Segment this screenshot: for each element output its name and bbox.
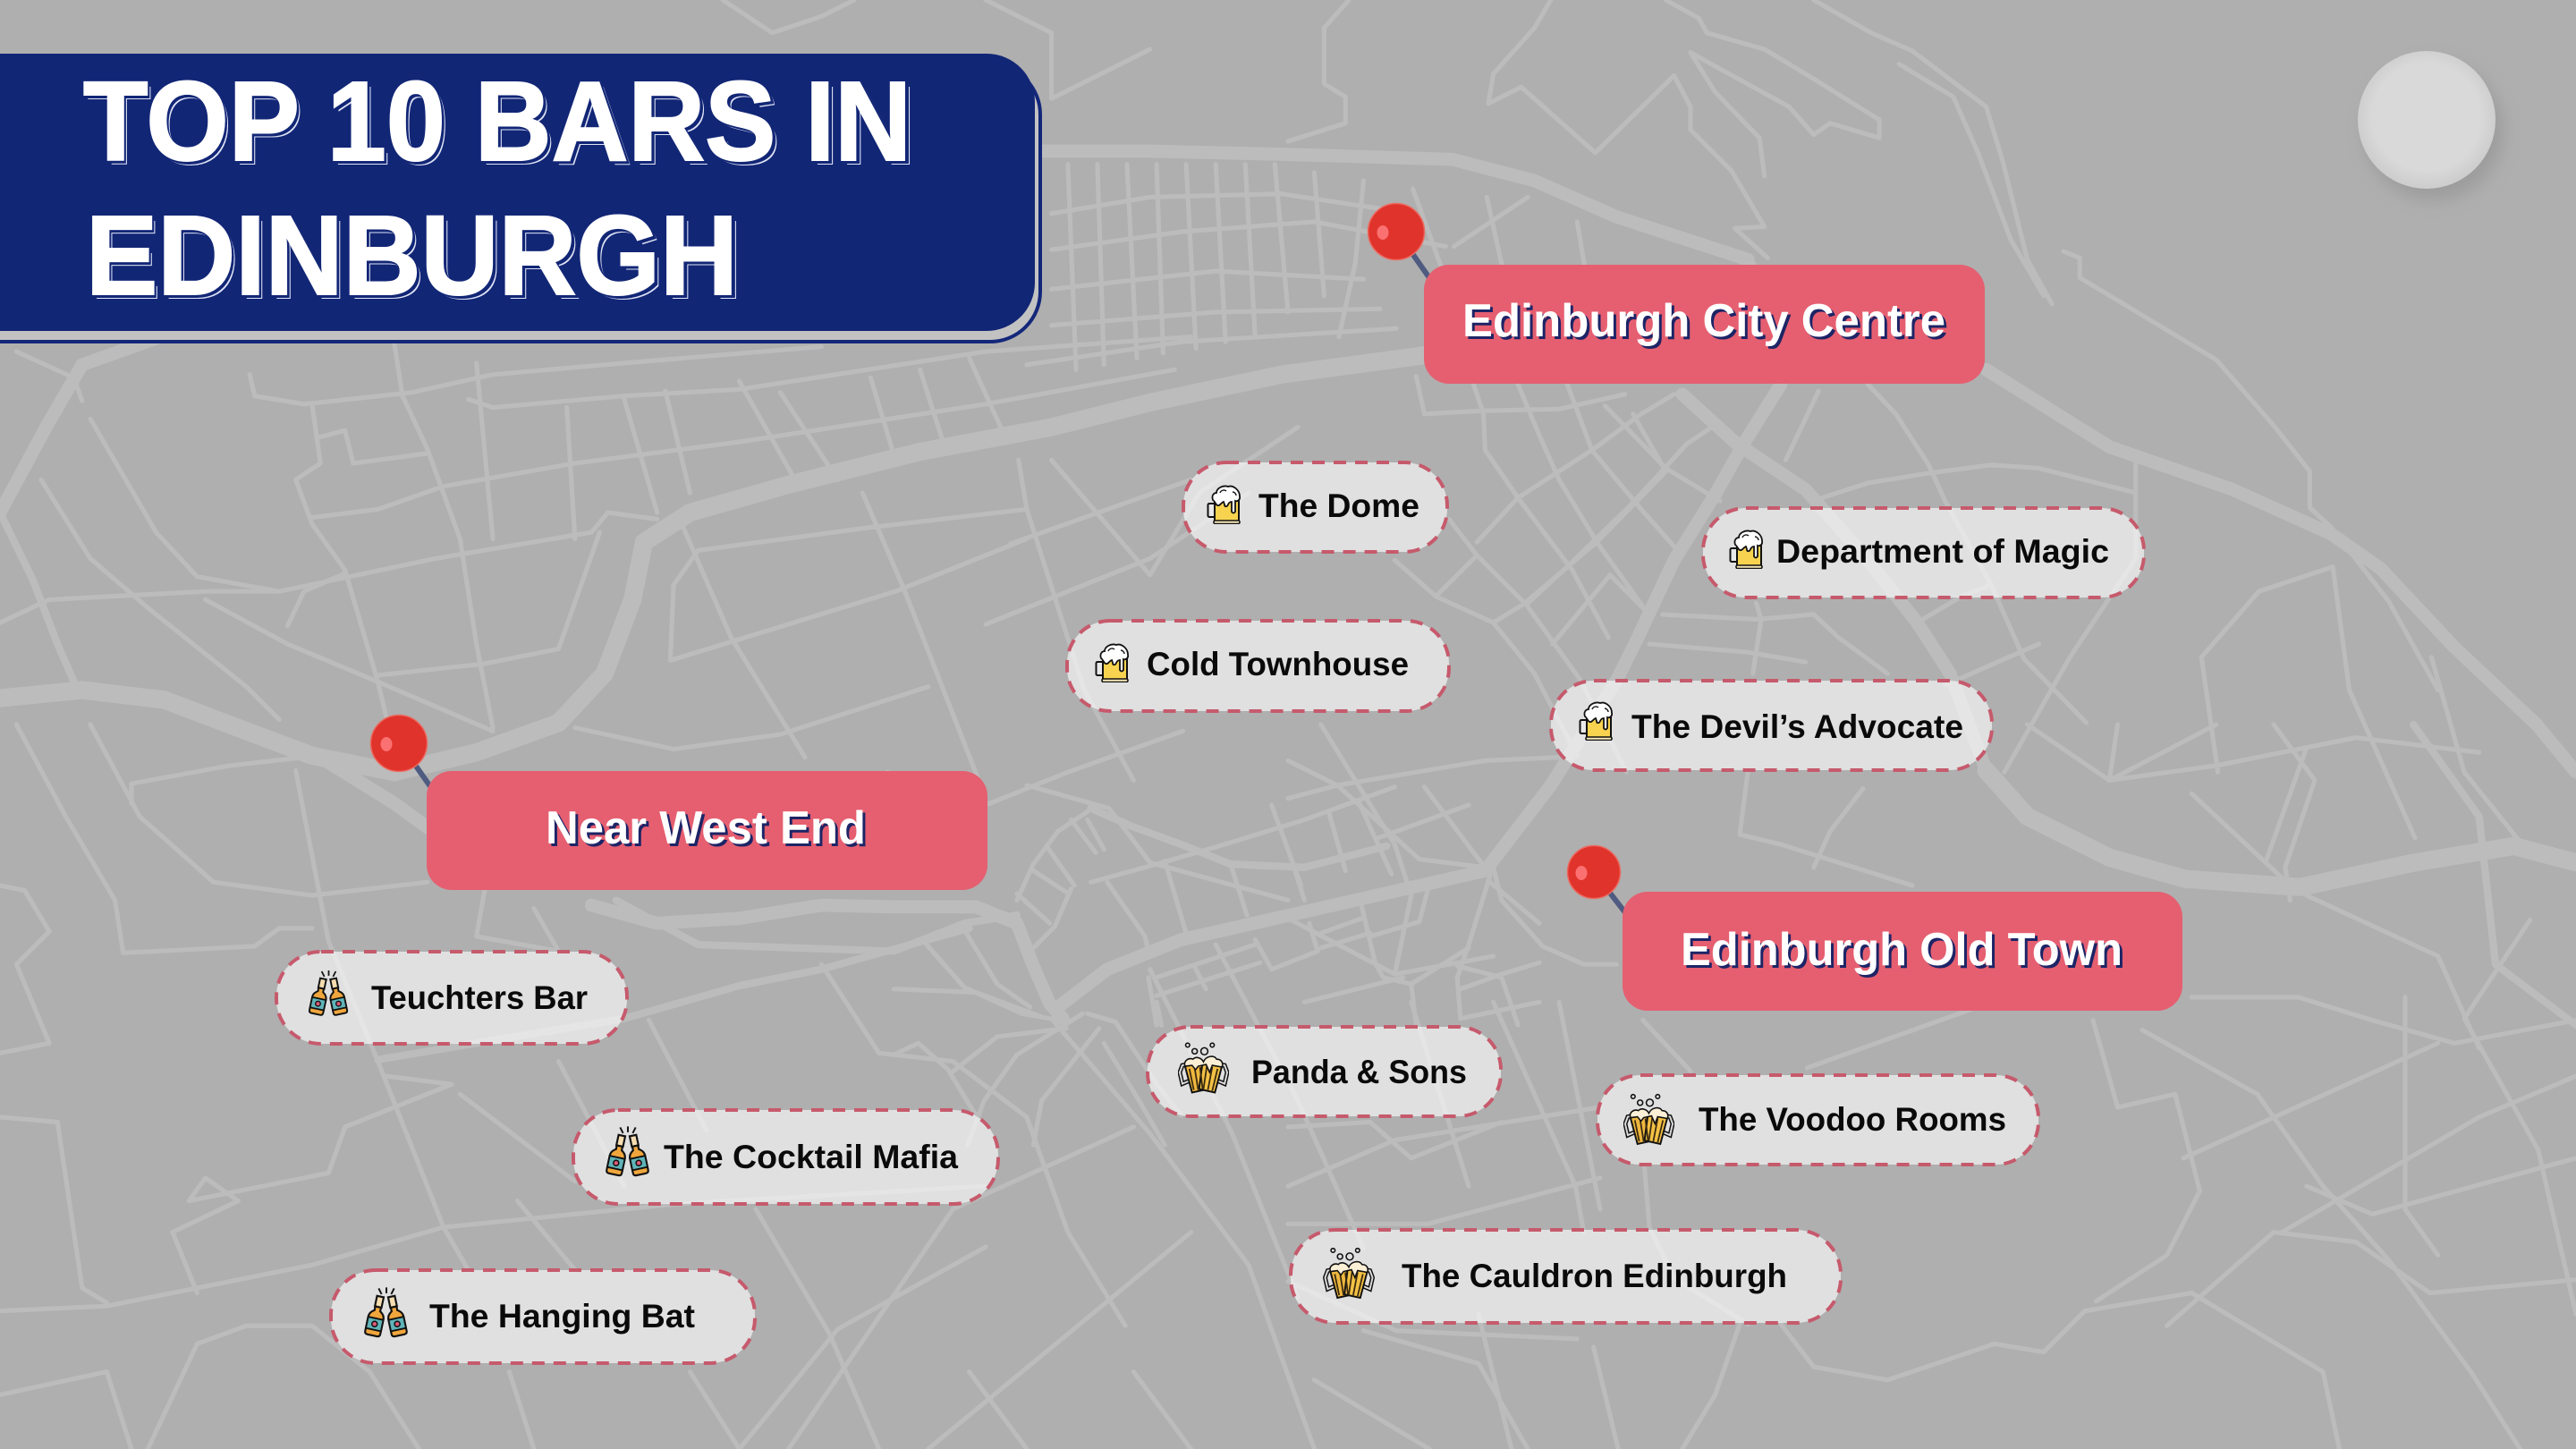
area label: Near West End xyxy=(427,771,987,890)
area pin: Edinburgh City Centre xyxy=(1368,204,1436,288)
bar: The Dome: The Dome xyxy=(1258,487,1419,524)
title text: TOP 10 BARS IN xyxy=(87,63,917,189)
area label: Near West End: Near West End xyxy=(548,805,869,857)
bar: The Cocktail Mafia xyxy=(573,1110,998,1204)
bar: The Hanging Bat xyxy=(331,1270,755,1363)
bar: The Cauldron Edinburgh xyxy=(1291,1230,1841,1323)
decorative logo disc xyxy=(2358,51,2504,200)
bottom-left streets xyxy=(16,724,312,953)
bar: The Voodoo Rooms: The Voodoo Rooms xyxy=(1699,1101,2006,1138)
area label: Edinburgh City Centre: Edinburgh City Centre xyxy=(1465,298,1948,350)
bar: Panda & Sons: Panda & Sons xyxy=(1251,1054,1467,1090)
top-left streets xyxy=(16,352,82,401)
area label: Edinburgh Old Town: Edinburgh Old Town xyxy=(1681,924,2123,976)
area label: Near West End: Near West End xyxy=(546,802,866,854)
top-centre grid xyxy=(1052,194,1413,214)
area pin: Near West End xyxy=(370,716,438,798)
title banner xyxy=(0,54,1040,342)
bar: Department of Magic xyxy=(1703,508,2144,597)
banner panel xyxy=(0,54,1035,331)
area label: Edinburgh Old Town: Edinburgh Old Town xyxy=(1683,927,2125,979)
top area xyxy=(1288,0,1349,141)
bar: The Devil's Advocate: The Devil’s Advocate xyxy=(1631,708,1963,745)
bar: The Cocktail Mafia: The Cocktail Mafia xyxy=(664,1139,958,1175)
title text: EDINBURGH xyxy=(86,192,738,318)
bar: The Cauldron Edinburgh: The Cauldron Edinburgh xyxy=(1402,1258,1787,1294)
area pin: Edinburgh Old Town xyxy=(1567,846,1633,923)
title text: TOP 10 BARS IN xyxy=(85,61,915,187)
centre-right grid xyxy=(1416,377,1625,414)
area label: Edinburgh Old Town xyxy=(1623,892,2182,1011)
area label: Edinburgh City Centre xyxy=(1424,265,1985,384)
title text: EDINBURGH xyxy=(88,195,741,321)
banner offset outline xyxy=(0,64,1040,342)
bar: Cold Townhouse xyxy=(1067,621,1449,711)
title text xyxy=(83,58,917,323)
bar: The Dome xyxy=(1183,462,1447,552)
bar: Cold Townhouse: Cold Townhouse xyxy=(1147,646,1409,682)
bar: Department of Magic: Department of Magic xyxy=(1776,533,2109,570)
bar: Panda & Sons xyxy=(1148,1027,1501,1116)
title text: TOP 10 BARS IN xyxy=(83,58,911,184)
bar: Teuchters Bar: Teuchters Bar xyxy=(371,979,588,1016)
bar: Teuchters Bar xyxy=(276,952,627,1044)
west-centre junction streets xyxy=(1017,811,1088,901)
bar: The Devil's Advocate xyxy=(1551,681,1992,770)
bar: The Hanging Bat: The Hanging Bat xyxy=(429,1298,695,1335)
area label: Edinburgh City Centre: Edinburgh City Centre xyxy=(1462,295,1945,347)
title text: EDINBURGH xyxy=(89,197,743,323)
bar: The Voodoo Rooms xyxy=(1597,1075,2038,1165)
